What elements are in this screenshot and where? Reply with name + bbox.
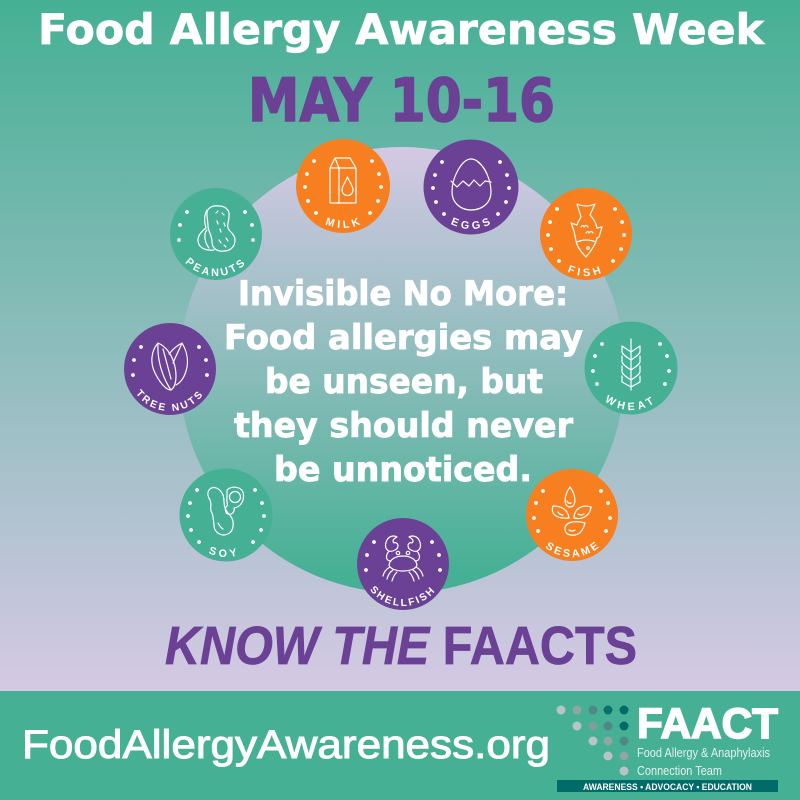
central message: be unnoticed.: [274, 450, 532, 490]
badge: tree nuts: [124, 323, 216, 415]
central message: Food allergies may: [224, 318, 583, 358]
footer band: [0, 691, 800, 800]
badge: sesame: [526, 469, 618, 561]
icon: almonds: [152, 343, 187, 390]
FAACT logo: AWARENESS • ADVOCACY • EDUCATION: [583, 782, 752, 792]
icon: milk carton: [330, 158, 356, 203]
badge: fish: [540, 188, 632, 280]
badge: eggs: [424, 140, 518, 234]
central circle: [179, 147, 625, 593]
badge: milk: MILK: [326, 218, 360, 228]
badge: milk: [296, 139, 390, 233]
badge: peanuts: PEANUTS: [185, 257, 244, 276]
badge: shellfish: [357, 518, 449, 610]
badge: peanuts: [170, 188, 262, 280]
tagline: KNOW THE FAACTS: [165, 616, 637, 676]
logo wordmark: FAACT: [637, 700, 778, 748]
logo dots: [556, 706, 628, 776]
badge: shellfish: SHELLFISH: [370, 586, 434, 606]
date heading: MAY 10-16: [248, 66, 555, 136]
central message: be unseen, but: [265, 362, 543, 402]
title: Food Allergy Awareness Week: [38, 5, 765, 54]
badge: soy: [180, 468, 272, 562]
logo name: Food Allergy & Anaphylaxis: [637, 746, 770, 760]
badge: wheat: [584, 322, 678, 414]
FAACT logo: Connection Team: [637, 764, 722, 778]
central message: Invisible No More:: [238, 274, 568, 314]
central message: [224, 274, 583, 490]
central message: they should never: [234, 406, 573, 446]
badge: soy: SOY: [209, 547, 236, 557]
icon: soybean pod: [208, 487, 244, 535]
badge: eggs: EGGS: [451, 217, 490, 229]
website url: FoodAllergyAwareness.org: [22, 723, 550, 767]
FAACT logo: [556, 700, 778, 792]
badge: sesame: SESAME: [546, 542, 599, 558]
icon: crab: [383, 536, 423, 581]
logo strapline bar: [557, 780, 778, 792]
badge: fish: FISH: [568, 265, 601, 276]
icon: wheat: [622, 339, 640, 390]
icon: fish: [571, 204, 602, 257]
badge: tree nuts: TREE NUTS: [137, 388, 202, 412]
icon: sesame seeds: [552, 487, 591, 535]
icon: peanut: [198, 206, 235, 251]
icon: cracked egg: [451, 159, 491, 210]
badge: wheat: WHEAT: [606, 394, 652, 410]
